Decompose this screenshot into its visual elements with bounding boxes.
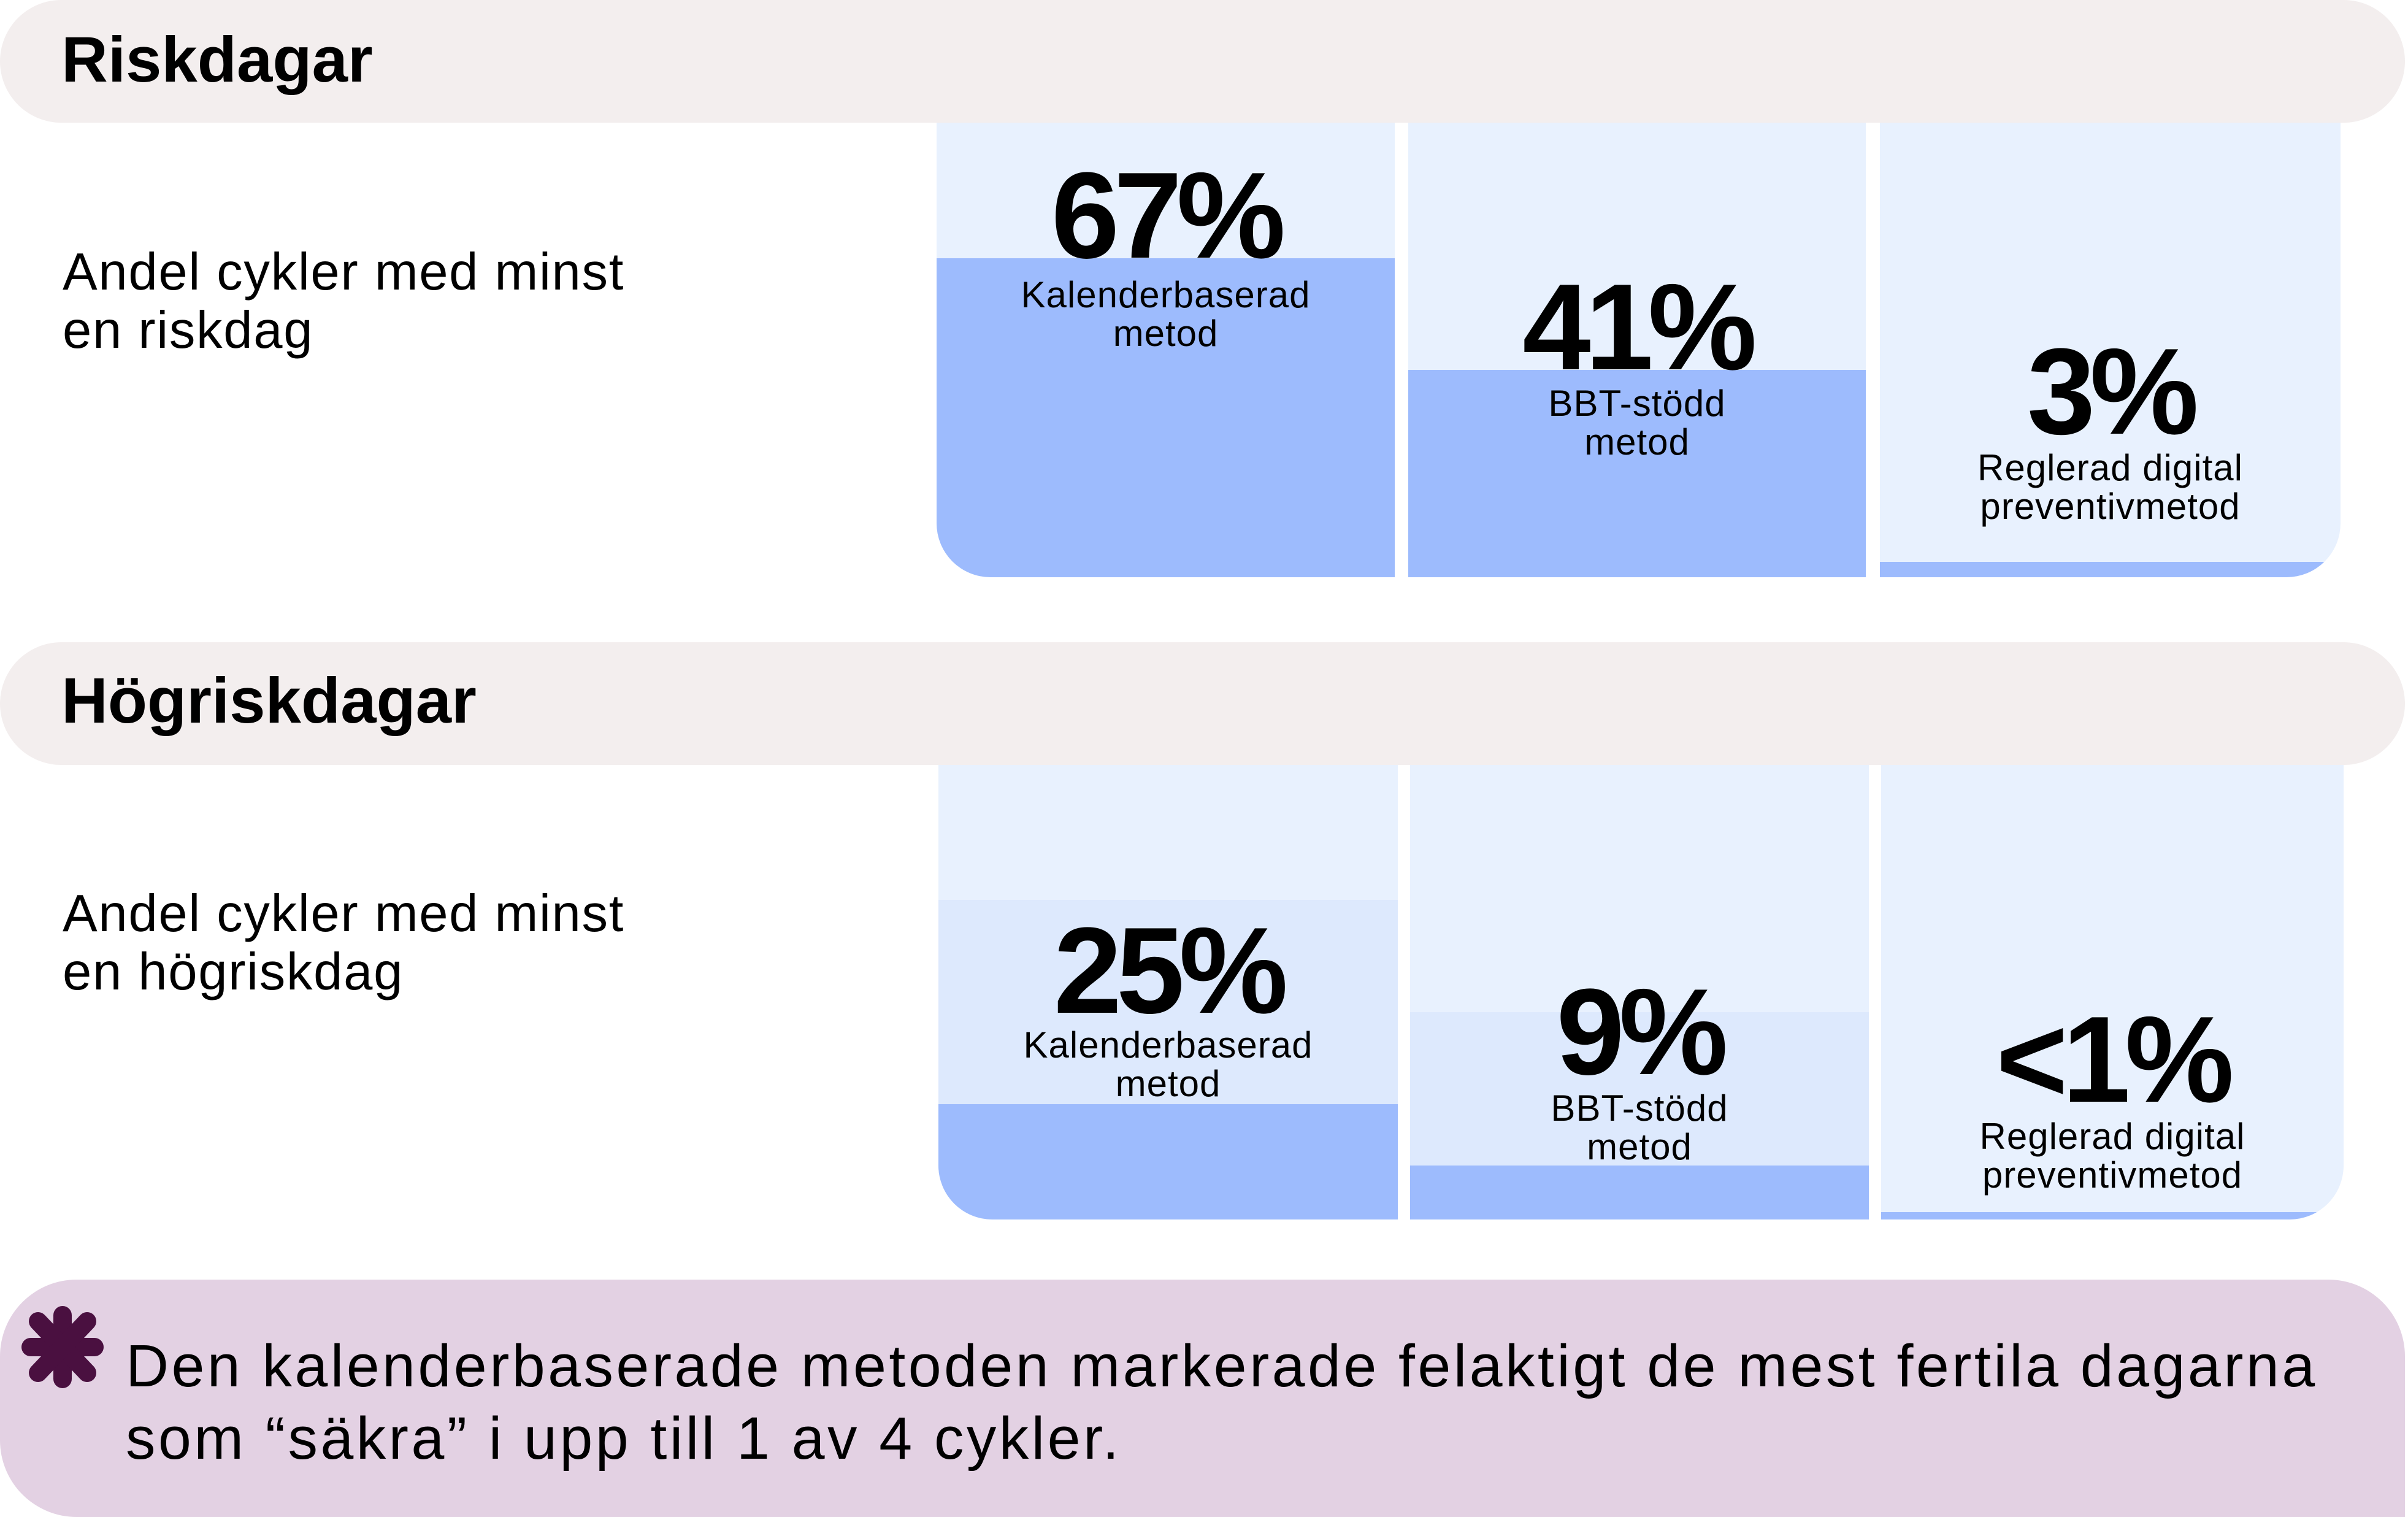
icon: asterisk bbox=[21, 1306, 104, 1388]
bar: kalender högrisk: 25% bbox=[1054, 902, 1283, 1039]
bar: BBT riskdag: metod bbox=[1584, 421, 1690, 463]
bar: digital riskdag: preventivmetod bbox=[1980, 486, 2241, 527]
callout text bbox=[126, 1332, 2318, 1472]
bar: kalender högrisk bbox=[938, 765, 1398, 1219]
label: högriskdag bbox=[63, 885, 624, 1001]
header: Högriskdagar: Högriskdagar bbox=[61, 665, 477, 737]
bar: BBT högrisk: BBT-stödd bbox=[1551, 1088, 1728, 1129]
bar: digital högrisk: <1% bbox=[1996, 991, 2228, 1128]
bar: kalender högrisk: Kalenderbaserad bbox=[1023, 1024, 1313, 1066]
label: riskdag: en riskdag bbox=[63, 301, 313, 359]
callout text: som “säkra” i upp till 1 av 4 cykler. bbox=[126, 1405, 1122, 1472]
bar: kalender riskdag: metod bbox=[1113, 313, 1218, 354]
callout text: Den kalenderbaserade metoden markerade felaktigt de mest fertila dagarna bbox=[126, 1332, 2318, 1399]
bar: digital högrisk: preventivmetod bbox=[1982, 1154, 2242, 1196]
label: riskdag bbox=[63, 243, 624, 359]
bar: BBT riskdag bbox=[1408, 123, 1866, 577]
bar: kalender riskdag: 67% bbox=[1051, 147, 1280, 284]
bar: digital riskdag: Reglerad digital bbox=[1977, 447, 2243, 488]
label: högriskdag: Andel cykler med minst bbox=[63, 885, 624, 943]
bar: kalender högrisk: metod bbox=[1116, 1063, 1221, 1104]
bar: BBT högrisk bbox=[1410, 765, 1869, 1219]
bar: digital högrisk: Reglerad digital bbox=[1980, 1116, 2245, 1157]
label: högriskdag: en högriskdag bbox=[63, 943, 404, 1001]
bar: BBT riskdag: BBT-stödd bbox=[1548, 383, 1726, 424]
header: Riskdagar bbox=[0, 0, 2405, 123]
callout footer bbox=[0, 1280, 2405, 1517]
bar: BBT högrisk: metod bbox=[1587, 1126, 1692, 1167]
bar: digital högrisk bbox=[1881, 765, 2344, 1219]
header: Högriskdagar bbox=[0, 642, 2405, 765]
bar: kalender riskdag: Kalenderbaserad bbox=[1021, 274, 1310, 315]
bar: digital riskdag: 3% bbox=[2027, 323, 2193, 460]
header: Riskdagar: Riskdagar bbox=[61, 24, 373, 96]
bar: kalender riskdag bbox=[937, 123, 1395, 577]
label: riskdag: Andel cykler med minst bbox=[63, 243, 624, 301]
bar: digital riskdag bbox=[1880, 123, 2341, 577]
bar: BBT högrisk: 9% bbox=[1556, 964, 1723, 1100]
bar: BBT riskdag: 41% bbox=[1522, 259, 1752, 396]
